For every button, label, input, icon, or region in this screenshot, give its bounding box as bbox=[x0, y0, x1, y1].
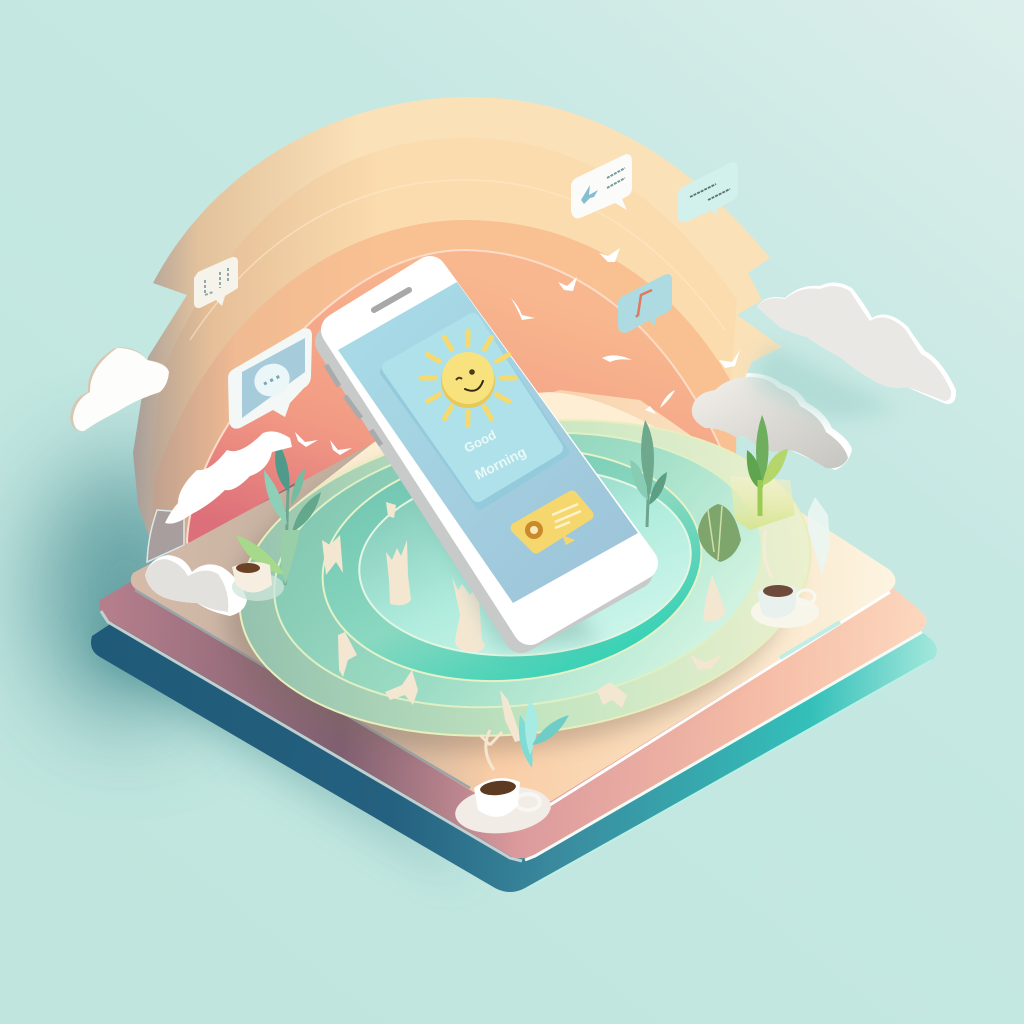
smile bbox=[465, 381, 483, 391]
coffee bbox=[763, 585, 793, 597]
bubble bbox=[194, 257, 238, 308]
roots and fingers bbox=[322, 502, 726, 742]
arc band: salmon bbox=[187, 250, 730, 570]
weather card bbox=[385, 320, 564, 505]
left small coffee cup bbox=[232, 562, 284, 601]
rainbow arcs bbox=[133, 97, 782, 570]
shrub veins bbox=[708, 506, 722, 560]
coffee bbox=[236, 563, 260, 573]
center left white cloud bbox=[165, 431, 292, 524]
root bbox=[386, 540, 411, 605]
bright green plant bbox=[747, 415, 788, 516]
message lines bbox=[552, 504, 581, 528]
bird bbox=[295, 432, 318, 447]
yellow message bbox=[516, 496, 588, 548]
cup bbox=[757, 585, 797, 618]
music note bubble bbox=[618, 274, 672, 333]
screen bbox=[338, 282, 638, 603]
phone bbox=[326, 273, 641, 650]
white birds bbox=[295, 248, 740, 455]
text lines bbox=[607, 168, 625, 188]
bubble bbox=[678, 162, 738, 222]
sun bbox=[441, 354, 495, 408]
middle layer: pink card bbox=[99, 480, 927, 861]
peach card cyan highlight bbox=[780, 622, 840, 658]
message box bbox=[516, 496, 588, 548]
root bbox=[452, 577, 485, 652]
stem bbox=[758, 480, 762, 516]
card text: Good bbox=[462, 427, 499, 456]
card surface bbox=[389, 320, 556, 495]
background drop shadow bbox=[40, 460, 470, 880]
leaf bbox=[762, 449, 788, 486]
handle bbox=[516, 794, 540, 810]
left wink bbox=[456, 378, 462, 380]
bird bbox=[719, 350, 740, 368]
cloud edge bbox=[720, 373, 852, 470]
arc band: second bbox=[150, 138, 737, 540]
cloud shadow bbox=[750, 345, 900, 420]
peach card lower left edge bbox=[135, 590, 470, 788]
root bbox=[386, 502, 396, 518]
stem bbox=[647, 470, 649, 527]
leaf bbox=[275, 440, 290, 492]
top right bubble: mint message bbox=[678, 162, 738, 222]
chat bubble with face bbox=[228, 328, 312, 429]
cloud face bbox=[73, 348, 169, 431]
disc 2 bbox=[258, 406, 778, 734]
root bbox=[322, 535, 343, 575]
phone side bbox=[332, 285, 636, 636]
saucer bbox=[453, 782, 553, 838]
bubble frame bbox=[228, 328, 312, 429]
steam bbox=[480, 730, 502, 770]
text lines bbox=[690, 184, 730, 200]
message tail bbox=[562, 535, 575, 545]
bird bbox=[660, 390, 675, 408]
shrub leaf bbox=[698, 504, 741, 562]
airplane icon bbox=[581, 185, 598, 204]
phone shadow bbox=[360, 360, 600, 650]
phone body bbox=[338, 273, 641, 628]
concentric discs bbox=[210, 389, 829, 779]
music note bbox=[636, 290, 652, 317]
message icon center bbox=[530, 526, 538, 534]
top right bubble: airplane bbox=[571, 154, 632, 218]
blue card right edge bbox=[528, 660, 932, 888]
leaf bbox=[525, 700, 538, 755]
leaf bbox=[756, 415, 768, 490]
bird bbox=[511, 298, 535, 320]
side buttons bbox=[326, 365, 381, 445]
glass shard bbox=[808, 497, 830, 575]
stem bbox=[285, 490, 288, 585]
cup bbox=[474, 778, 520, 817]
top left bubble bbox=[194, 257, 238, 308]
face circle bbox=[249, 358, 295, 402]
round shrub bbox=[698, 504, 741, 562]
bird bbox=[645, 406, 656, 414]
leaf bbox=[236, 535, 285, 575]
leaf bbox=[264, 470, 287, 525]
cloud white side bbox=[757, 282, 956, 404]
left cloud bbox=[70, 348, 169, 431]
card shadow edge bbox=[385, 320, 564, 505]
cup bbox=[232, 562, 272, 592]
cream hill bbox=[300, 392, 800, 600]
glow behind green plant bbox=[730, 476, 795, 530]
front coffee cup bbox=[453, 730, 553, 838]
large right cloud bbox=[750, 282, 956, 420]
faint band line bbox=[190, 180, 725, 340]
sun face bbox=[442, 352, 494, 404]
shadow left of stack bbox=[40, 460, 210, 720]
root bbox=[385, 670, 418, 705]
root bbox=[500, 690, 522, 742]
cloud face bbox=[757, 286, 951, 401]
shadow beneath lower left edge bbox=[90, 610, 470, 880]
leaf bbox=[641, 420, 654, 495]
leaf bbox=[519, 715, 532, 768]
root bbox=[690, 655, 722, 670]
leaf bbox=[649, 472, 667, 505]
pink card surface bbox=[99, 480, 927, 858]
middle right grey cloud bbox=[692, 373, 852, 470]
leaf bbox=[747, 450, 762, 490]
peach card lower right edge bbox=[545, 592, 890, 808]
steam bbox=[764, 530, 772, 578]
handle bbox=[797, 590, 815, 604]
teal plant bbox=[519, 700, 569, 768]
left plant bbox=[236, 440, 321, 585]
bird bbox=[602, 355, 632, 362]
saucer bbox=[232, 573, 284, 601]
bubble bbox=[571, 154, 632, 218]
bottom layer: blue card bbox=[91, 500, 937, 892]
speaker bbox=[374, 290, 409, 310]
leaf bbox=[291, 468, 305, 505]
bird bbox=[330, 440, 352, 455]
card text: Morning bbox=[472, 443, 529, 483]
bubble screen bbox=[242, 338, 305, 418]
face dots bbox=[264, 376, 280, 384]
message icon bbox=[525, 521, 543, 539]
bird bbox=[558, 277, 577, 291]
sun rays bbox=[421, 331, 515, 425]
pink card lower right edge bbox=[525, 632, 922, 860]
center plant bbox=[630, 420, 667, 527]
glass edge of dome bbox=[147, 510, 184, 562]
root bbox=[338, 632, 357, 677]
root bbox=[703, 575, 726, 621]
bottom left cloud bbox=[145, 555, 247, 616]
arc band: outer bbox=[133, 97, 782, 540]
peach card surface bbox=[131, 390, 896, 814]
disc 1 bbox=[221, 389, 829, 767]
disc 3 bbox=[311, 431, 713, 699]
cloud side bbox=[145, 555, 247, 616]
cloud face bbox=[145, 559, 228, 612]
root bbox=[597, 682, 627, 708]
leaf bbox=[630, 460, 648, 500]
bubble glyphs bbox=[205, 268, 228, 295]
cloud tan edge bbox=[70, 348, 168, 431]
pink card lower left edge bbox=[101, 611, 522, 861]
right eye bbox=[469, 369, 475, 375]
right coffee cup bbox=[751, 530, 819, 628]
leaf bbox=[281, 530, 300, 585]
saucer bbox=[751, 596, 819, 628]
arc band: orange bbox=[150, 220, 737, 555]
disc shadow bbox=[210, 411, 810, 779]
cloud face bbox=[692, 377, 848, 468]
bird bbox=[599, 248, 620, 262]
leaf bbox=[292, 492, 321, 532]
bubble bbox=[618, 274, 672, 333]
top layer: peach card bbox=[131, 390, 896, 814]
leaf bbox=[532, 715, 569, 745]
coffee bbox=[479, 779, 517, 797]
disc 4 bbox=[353, 458, 697, 666]
